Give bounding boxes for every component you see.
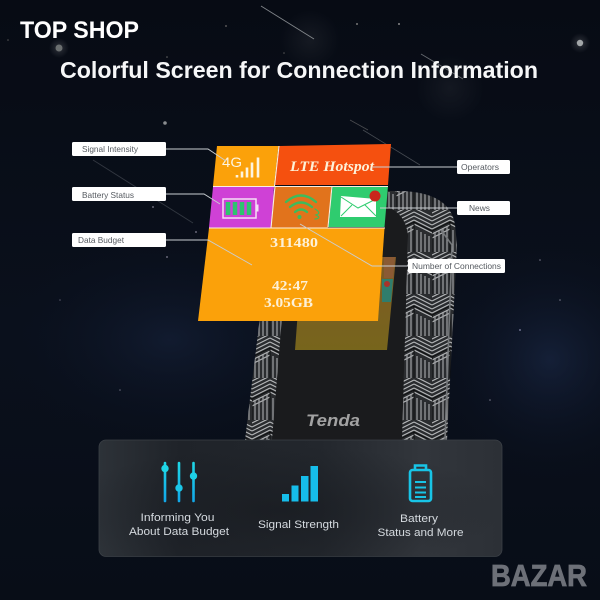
callout: Operators: Operators [461,162,499,172]
text: signal strength: Signal Strength [258,519,339,531]
callout: News: News [469,203,490,213]
data figures: 3.05GB [264,296,313,311]
text: battery [378,513,464,539]
LTE Hotspot cell [274,144,391,185]
status screen [198,144,391,321]
data figures: 42:47 [272,279,308,294]
phone device [245,191,457,440]
data figures: 311480 [270,236,318,251]
callout: Signal Intensity: Signal Intensity [82,144,139,154]
icon: battery [410,466,431,501]
icon: signal bars [282,466,318,502]
feature: battery [378,466,464,539]
callout leader lines [166,149,457,266]
icon: sliders [161,463,197,501]
phone textured body [245,191,457,440]
feature: data budget [129,463,229,538]
phone front face [272,206,408,440]
callout: Data Budget [72,233,166,247]
callout: Data Budget: Data Budget [78,235,125,245]
wifi cell [272,186,332,228]
text: data budget [129,512,229,538]
data figures [264,236,318,311]
4G signal cell [213,146,278,186]
text: data budget: About Data Budget [129,526,229,538]
LTE Hotspot cell: LTE Hotspot [289,159,375,175]
watermark: Bazar logo: BAZAR [491,558,587,593]
callout: Number of Connections [408,259,505,273]
panel: features [99,440,502,556]
callout: Signal Intensity [72,142,166,156]
callout: News [457,201,510,215]
brand: Tenda: Tenda [306,411,360,430]
text: data budget: Informing You [140,512,214,524]
data budget cell [198,228,384,321]
callout: Number of Connections: Number of Connections [412,261,501,271]
4G signal cell: 4G [222,154,242,170]
news cell [328,186,388,227]
title: Colorful Screen for Connection Information [60,57,538,83]
text: battery: Status and More [378,527,464,539]
logo: TOP SHOP: TOP SHOP [20,17,139,44]
battery cell [209,187,274,228]
feature: signal strength [258,466,339,531]
callout: Battery Status [72,187,166,201]
text: battery: Battery [400,513,439,525]
callout: Battery Status: Battery Status [82,190,134,200]
callout: Operators [457,160,510,174]
grid lines [209,146,388,228]
phone screen ghost [295,257,396,350]
